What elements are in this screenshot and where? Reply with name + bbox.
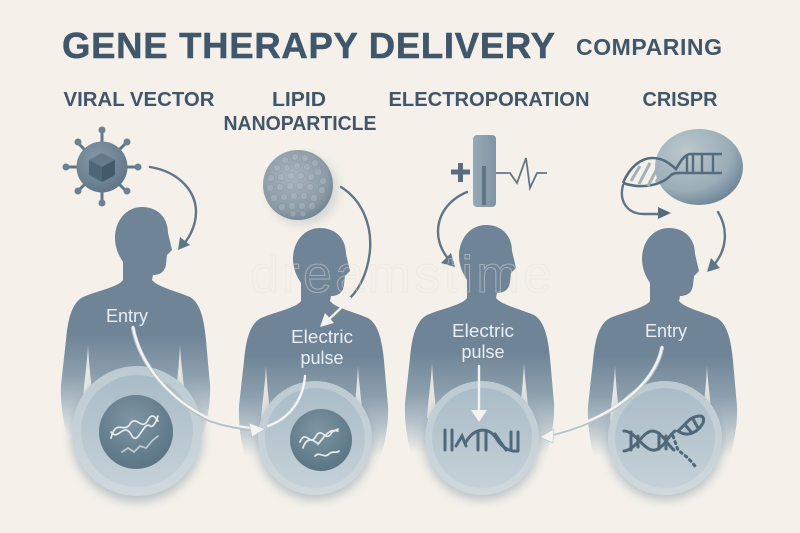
silhouette: person 1 bbox=[61, 207, 210, 440]
label: entry: Entry bbox=[645, 321, 687, 341]
cell 1 bbox=[71, 366, 203, 502]
heading: electroporation: ELECTROPORATION bbox=[388, 89, 590, 111]
icon: nanoparticle bbox=[263, 150, 338, 225]
arrow: virus to head bbox=[150, 167, 196, 250]
icon: electrode with pulse bbox=[451, 135, 547, 207]
heading: lipid nanoparticle bbox=[224, 89, 376, 135]
silhouette: person 2 bbox=[239, 228, 388, 461]
arrow: entry to cell 2 bbox=[133, 327, 265, 437]
label: electric pulse: pulse bbox=[461, 342, 505, 362]
icon: crispr complex bbox=[622, 129, 743, 219]
silhouette: person 4 bbox=[588, 228, 737, 461]
icon: dna with cut in cell 4 bbox=[624, 416, 704, 466]
arrow: crispr to head bbox=[707, 212, 725, 272]
icon: dna in nucleus 1 bbox=[111, 416, 158, 452]
cell 3 bbox=[424, 381, 540, 500]
watermark: dreamstime bbox=[250, 246, 552, 304]
cell 4 bbox=[607, 381, 723, 500]
silhouette: person 3 bbox=[405, 225, 554, 458]
icon: dna in cell 3 bbox=[445, 430, 518, 451]
label: electric pulse: Electric bbox=[452, 321, 514, 341]
label: electric pulse: pulse bbox=[300, 348, 344, 368]
label: electric pulse bbox=[452, 321, 514, 362]
arrow: nanoparticle to body bbox=[320, 187, 370, 327]
label: electric pulse bbox=[291, 327, 353, 368]
cell 2 bbox=[257, 381, 373, 500]
subtitle: COMPARING bbox=[576, 34, 722, 60]
panel: viral vector bbox=[61, 126, 210, 502]
arrow: pulse to cell 2 bbox=[268, 376, 305, 426]
icon: virus bbox=[62, 126, 142, 206]
heading: lipid nanoparticle: NANOPARTICLE bbox=[224, 113, 376, 135]
title: GENE THERAPY DELIVERY bbox=[62, 25, 555, 66]
label: electric pulse: Electric bbox=[291, 327, 353, 347]
label: entry: Entry bbox=[106, 306, 148, 326]
heading: crispr: CRISPR bbox=[642, 89, 718, 111]
icon: dna in nucleus 2 bbox=[300, 429, 339, 456]
arrow: electrode to head bbox=[438, 192, 467, 267]
panel: electroporation bbox=[405, 135, 554, 500]
arrow: entry to cell 3 bbox=[540, 347, 662, 443]
panel: lipid nanoparticle bbox=[133, 150, 388, 500]
heading: lipid nanoparticle: LIPID bbox=[272, 89, 326, 111]
heading: viral vector: VIRAL VECTOR bbox=[64, 89, 215, 111]
panel: crispr bbox=[540, 129, 743, 500]
arrow: pulse to dna bbox=[471, 366, 487, 422]
